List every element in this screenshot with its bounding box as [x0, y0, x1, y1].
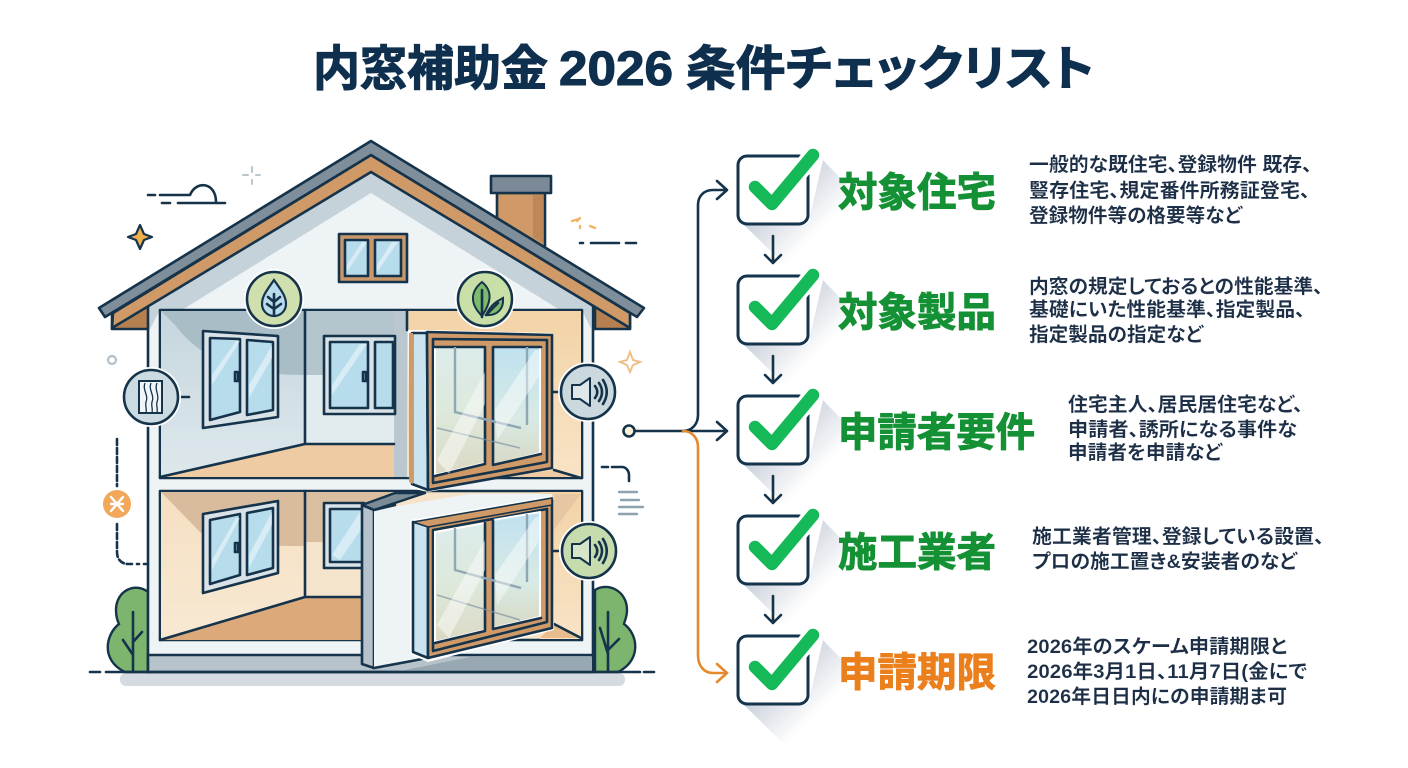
check item: 対象住宅 [738, 154, 1312, 270]
description: 豎存住宅、規定番件所務証登宅、 [1029, 180, 1310, 202]
description [1068, 394, 1303, 464]
checkbox [738, 515, 850, 630]
arrow [765, 476, 781, 503]
description: 指定製品の指定など [1029, 324, 1205, 346]
checkbox [738, 155, 850, 270]
ground shadow [120, 673, 625, 686]
description: 2026年日日内にの申請期ま可 [1027, 685, 1287, 708]
icon: insulation badge [121, 367, 189, 427]
description: 申請者、誘所になる事件な [1068, 419, 1297, 441]
label: 対象製品 [838, 291, 996, 335]
icon: speaker badge grey [552, 362, 618, 422]
gable shadow [150, 173, 591, 329]
description: 2026年のスケーム申請期限と [1027, 635, 1287, 658]
label: 施工業者 [838, 531, 996, 575]
icon: right tree [595, 587, 635, 672]
window: upper back [324, 336, 395, 414]
icon: speaker badge green [552, 521, 619, 581]
title [313, 43, 1094, 96]
title: 条件チェックリスト [686, 43, 1094, 96]
description: 申請者を申請など [1068, 442, 1224, 464]
icon: two leaves badge [455, 269, 515, 329]
chimney [491, 176, 551, 248]
check item: 申請者要件 [738, 394, 1303, 510]
decoration: cloud [148, 185, 225, 203]
description [1027, 635, 1307, 708]
label: 申請期限 [838, 651, 996, 695]
connector: from house to checklist [624, 181, 727, 682]
checkbox [738, 635, 850, 750]
upper room: right [407, 310, 581, 477]
description: プロの施工置き&安装者のなど [1032, 551, 1299, 573]
description: 施工業者管理、登録している設置、 [1032, 525, 1324, 548]
window: lower back [324, 503, 364, 568]
title: 内窓補助金 [313, 43, 548, 96]
foundation [148, 655, 593, 672]
ground line [90, 671, 654, 673]
check item: 施工業者 [738, 515, 1324, 630]
window: upper left [203, 331, 278, 428]
roof [99, 141, 644, 329]
checkbox [738, 275, 850, 390]
label: 対象住宅 [838, 171, 996, 215]
house walls [148, 172, 593, 672]
arrow [765, 356, 781, 383]
decoration: sparkles and marks [108, 167, 643, 564]
checkbox [738, 395, 850, 510]
arrow [765, 596, 781, 623]
arrow [765, 236, 781, 263]
description [1029, 154, 1312, 227]
window: lower left [203, 501, 278, 593]
description [1032, 525, 1324, 573]
icon: left tree [108, 588, 148, 672]
description: 一般的な既住宅、登録物件 既存、 [1029, 154, 1312, 176]
title: 2026 [559, 43, 673, 96]
lower room [160, 470, 582, 640]
description: 住宅主人、居民居住宅など、 [1068, 394, 1303, 416]
description: 登録物件等の格要等など [1029, 205, 1244, 227]
open wall panel [362, 493, 552, 668]
house illustration [90, 141, 654, 686]
description: 2026年3月1日、11月7日(金にで [1027, 660, 1307, 683]
large window: lower [410, 496, 554, 662]
check item: 対象製品 [738, 275, 1323, 390]
description: 内窓の規定しておるとの性能基準、 [1029, 275, 1323, 298]
description [1029, 275, 1323, 346]
label: 申請者要件 [838, 411, 1035, 455]
upper room: left [160, 310, 582, 478]
check item: 申請期限 [738, 635, 1307, 750]
description: 基礎にいた性能基準、指定製品、 [1029, 298, 1305, 321]
window: attic [339, 234, 407, 282]
large window: upper [408, 330, 554, 492]
icon: leaf badge [244, 269, 304, 329]
icon: orange tools badge [103, 490, 131, 518]
